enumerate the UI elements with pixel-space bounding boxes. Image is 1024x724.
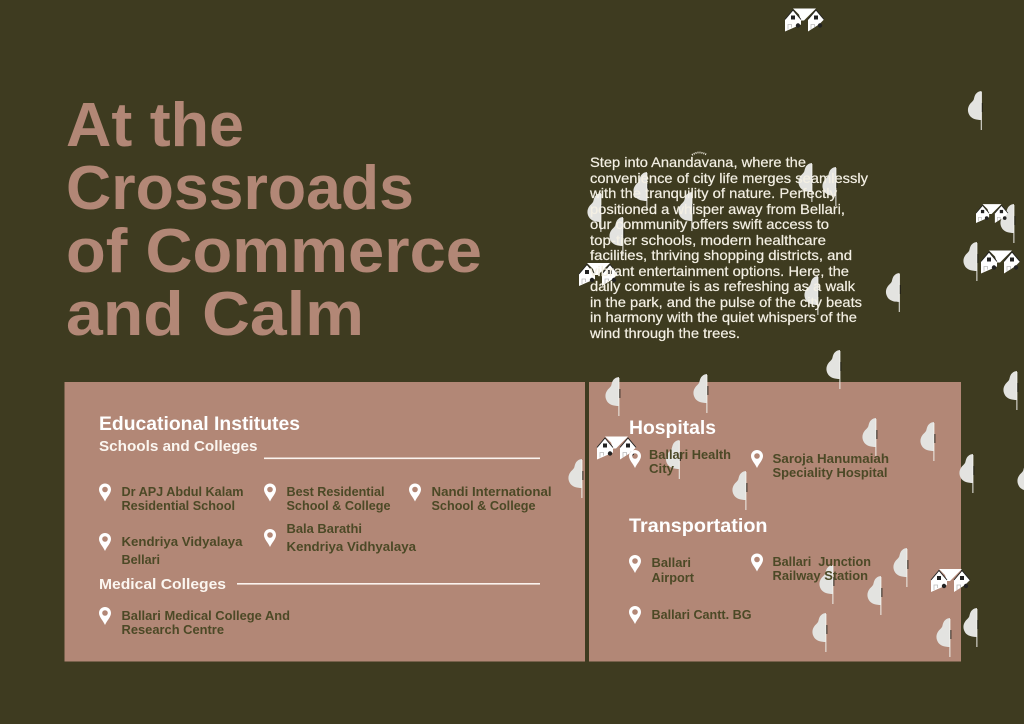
list item: Best Residential: School & College <box>286 498 390 513</box>
list item: Bala Barathi <box>264 521 417 554</box>
subheading: schools and colleges: Schools and Colleges <box>99 438 258 455</box>
list item: Ballari Cantt. BG: Ballari Cantt. BG <box>652 607 752 622</box>
list item: Ballari Airport <box>629 555 695 585</box>
list item: Ballari Health City: City <box>649 461 675 476</box>
list item: Dr APJ Abdul Kalam: Residential School <box>122 498 235 513</box>
list item: Dr APJ Abdul Kalam: Dr APJ Abdul Kalam <box>122 484 244 499</box>
intro paragraph: in harmony with the quiet whispers of the <box>590 309 857 325</box>
list item: Bala Barathi: Bala Barathi <box>286 521 362 536</box>
panel: educational institutes <box>64 382 585 662</box>
intro paragraph: top-tier schools, modern healthcare <box>590 232 826 248</box>
decorative scattered houses <box>579 8 1020 592</box>
heading: educational institutes: Educational Institutes <box>99 414 300 435</box>
title <box>66 90 482 349</box>
decorative small mark above paragraph <box>692 152 707 155</box>
list item: Ballari Medical College <box>99 607 290 637</box>
list item: Saroja Hanumaiah: Speciality Hospital <box>772 465 888 480</box>
list item: Nandi International: School & College <box>432 498 536 513</box>
heading: transportation: Transportation <box>629 516 768 537</box>
list item: Ballari Airport: Airport <box>652 570 695 585</box>
list item: Nandi International: Nandi International <box>432 484 552 499</box>
title: Crossroads <box>66 153 414 223</box>
list item: Best Residential: Best Residential <box>286 484 384 499</box>
subheading: medical colleges: Medical Colleges <box>99 576 226 593</box>
list item: Kendriya Vidyalaya Bellari <box>99 533 243 567</box>
panel: hospitals and transportation <box>589 382 961 662</box>
intro paragraph: wind through the trees. <box>589 325 740 341</box>
list item: Ballari Airport: Ballari <box>652 555 691 570</box>
heading: hospitals: Hospitals <box>629 418 716 439</box>
intro paragraph: vibrant entertainment options. Here, the <box>590 263 849 279</box>
decorative scattered trees <box>568 91 1024 657</box>
list item: Bala Barathi: Kendriya Vidhyalaya <box>286 539 417 554</box>
list item: Dr APJ Abdul Kalam <box>99 484 244 513</box>
list item: Best Residential <box>264 484 390 513</box>
intro paragraph: with the tranquility of nature. Perfectly <box>589 185 837 201</box>
list item: Kendriya Vidyalaya Bellari: Bellari <box>122 552 160 567</box>
list item: Ballari Health City: Ballari Health <box>649 447 731 462</box>
list item: Ballari Medical College: Research Centre <box>122 622 224 637</box>
list item: Kendriya Vidyalaya Bellari: Kendriya Vidyalaya <box>122 534 243 549</box>
title: and Calm <box>66 279 364 349</box>
title: of Commerce <box>66 216 482 286</box>
intro paragraph: our community offers swift access to <box>590 216 829 232</box>
intro paragraph: daily commute is as refreshing as a walk <box>590 278 856 294</box>
intro paragraph <box>589 154 868 341</box>
list item: Ballari Junction: Railway Station <box>772 568 868 583</box>
intro paragraph: positioned a whisper away from Bellari, <box>590 201 845 217</box>
list item: Ballari Junction <box>751 554 871 583</box>
intro paragraph: facilities, thriving shopping districts, and <box>590 247 852 263</box>
list item: Saroja Hanumaiah: Saroja Hanumaiah <box>772 451 889 466</box>
intro paragraph: in the park, and the pulse of the city beats <box>590 294 862 310</box>
list item: Ballari Junction: Ballari Junction <box>772 554 871 569</box>
title: At the <box>66 90 244 160</box>
list item: Nandi International <box>409 484 552 513</box>
intro paragraph: Step into Anandavana, where the <box>590 154 806 170</box>
list item: Ballari Medical College: Ballari Medical College And <box>122 608 290 623</box>
list item: Saroja Hanumaiah <box>751 450 889 480</box>
intro paragraph: convenience of city life merges seamlessly <box>590 170 868 186</box>
list item: Ballari Cantt. BG <box>629 606 752 624</box>
list item: Ballari Health City <box>629 447 731 476</box>
